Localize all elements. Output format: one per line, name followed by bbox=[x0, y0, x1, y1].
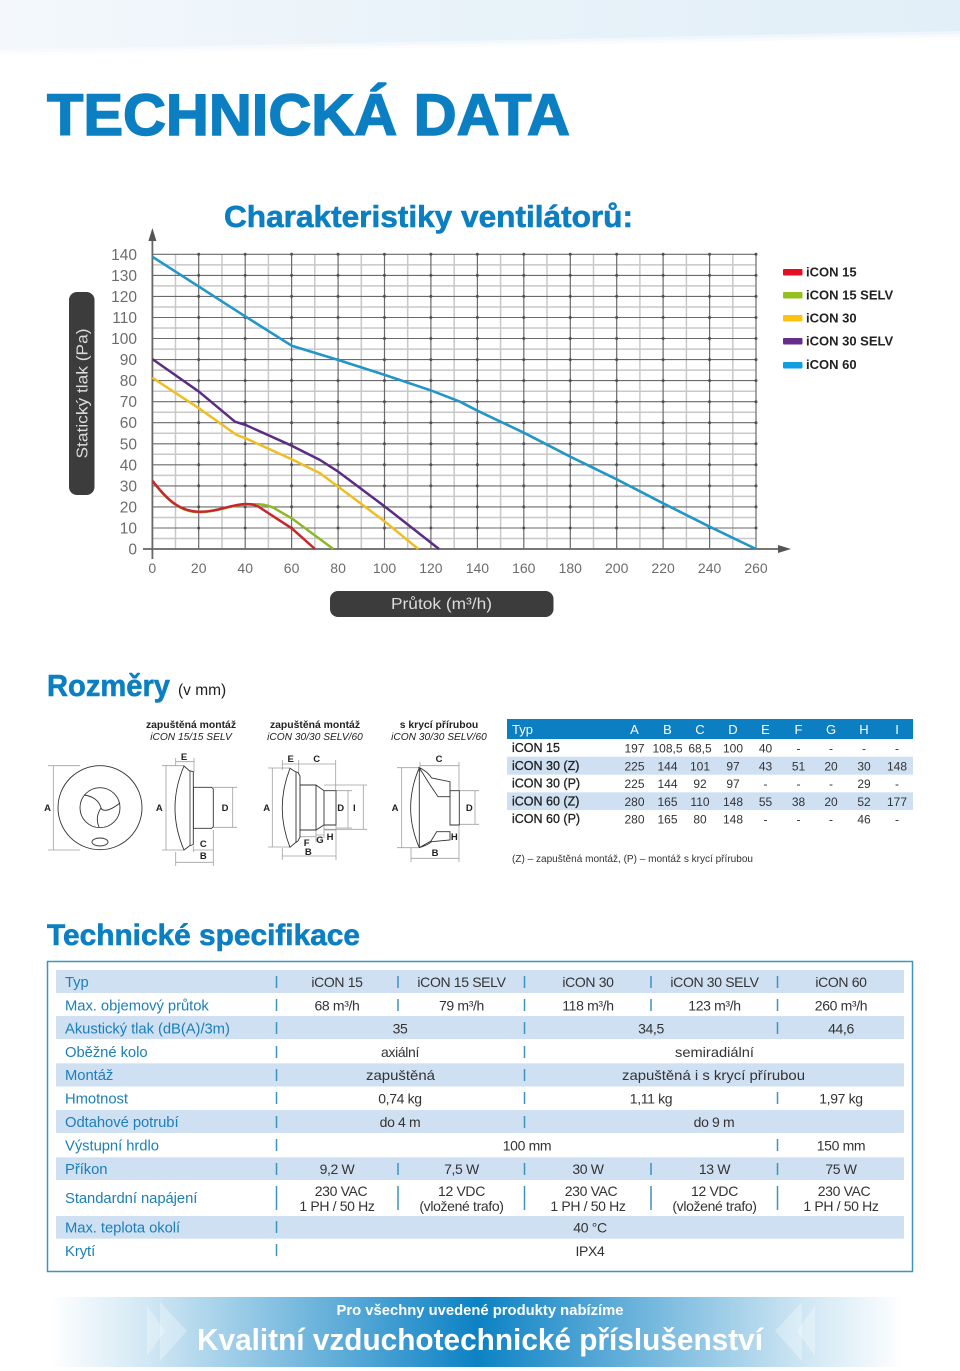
legend: iCON 15 bbox=[806, 264, 857, 280]
row: iCON 30 (P): 92 bbox=[693, 777, 707, 791]
row: ambient temperature: 40 °C bbox=[573, 1220, 607, 1236]
row: flow bbox=[65, 998, 867, 1014]
y axis title pill: Statický tlak (Pa) bbox=[74, 328, 92, 458]
row: iCON 30 (Z): 148 bbox=[887, 759, 907, 773]
row: ambient temperature: Max. teplota okolí bbox=[65, 1220, 181, 1236]
y axis labels: 120 bbox=[111, 289, 137, 306]
x axis labels: 180 bbox=[559, 560, 582, 576]
diagram: flush mount iCON 30/60: E bbox=[288, 754, 294, 765]
row: Typ: iCON 15 bbox=[311, 974, 363, 990]
row: iCON 60 (P): 165 bbox=[657, 812, 678, 826]
row: noise: Akustický tlak (dB(A)/3m) bbox=[65, 1022, 230, 1038]
x axis labels: 140 bbox=[466, 560, 489, 576]
row: power: Příkon bbox=[65, 1162, 107, 1178]
row: iCON 15: - bbox=[829, 742, 833, 756]
right chevrons bbox=[775, 1302, 815, 1361]
row: mounting: zapuštěná i s krycí přírubou bbox=[622, 1067, 805, 1083]
row: iCON 15: iCON 15 bbox=[512, 741, 560, 755]
row: iCON 30 (P): - bbox=[829, 777, 833, 791]
row: iCON 60 (Z): 20 bbox=[824, 795, 838, 809]
diagram: flush mount iCON 30/60: B bbox=[305, 847, 312, 858]
diagram: flush mount iCON 15: D bbox=[222, 803, 229, 814]
diagram: flush mount iCON 30/60: iCON 30/30 SELV/60 bbox=[267, 732, 363, 743]
row: mounting: Montáž bbox=[65, 1068, 113, 1084]
legend: iCON 60 bbox=[806, 357, 857, 372]
row: supply: (vložené trafo) bbox=[672, 1198, 757, 1214]
row: iCON 15: 40 bbox=[759, 742, 772, 756]
row: iCON 30 (Z): 51 bbox=[792, 759, 805, 773]
curve: iCON 30 SELV bbox=[152, 359, 439, 549]
table header: H bbox=[859, 722, 869, 737]
row: power bbox=[65, 1161, 858, 1178]
x axis labels: 120 bbox=[419, 560, 443, 576]
diagram: cover flange mount: B bbox=[432, 848, 439, 859]
row: supply bbox=[65, 1183, 879, 1214]
row: Typ bbox=[65, 974, 867, 991]
row: supply: Standardní napájení bbox=[65, 1191, 198, 1207]
row: weight: 0,74 kg bbox=[378, 1090, 422, 1106]
diagram: flush mount iCON 15: zapuštěná montáž bbox=[146, 720, 236, 731]
table header: A bbox=[630, 722, 639, 737]
diagram: flush mount iCON 30/60 bbox=[263, 720, 367, 860]
row: iCON 30 (Z): 144 bbox=[657, 759, 678, 773]
banner subtitle: Pro všechny uvedené produkty nabízíme bbox=[336, 1303, 624, 1319]
row: outlet bbox=[65, 1138, 865, 1154]
row: protection: IPX4 bbox=[576, 1243, 605, 1259]
x axis labels: 0 bbox=[148, 560, 156, 576]
row: Typ: iCON 30 SELV bbox=[670, 974, 760, 990]
row: iCON 60 (Z): 110 bbox=[690, 795, 710, 809]
table header: D bbox=[728, 722, 738, 737]
row: iCON 60 (Z) bbox=[507, 792, 913, 810]
diagram: cover flange mount: s krycí přírubou bbox=[400, 720, 478, 731]
x axis labels: 260 bbox=[744, 560, 768, 576]
table header bbox=[507, 719, 913, 739]
row: iCON 60 (P): 148 bbox=[723, 812, 743, 826]
row: iCON 15 bbox=[512, 741, 899, 756]
row: power: 75 W bbox=[825, 1161, 858, 1177]
row: weight: 1,97 kg bbox=[819, 1090, 863, 1106]
row: iCON 60 (P): - bbox=[764, 812, 768, 826]
row: iCON 30 (P): - bbox=[764, 777, 768, 791]
table header: G bbox=[826, 722, 836, 737]
x axis labels: 100 bbox=[373, 560, 396, 576]
y axis labels bbox=[111, 247, 137, 558]
row: iCON 60 (P): 280 bbox=[624, 812, 645, 826]
row: power: 7,5 W bbox=[444, 1161, 480, 1177]
row: power: 30 W bbox=[572, 1161, 605, 1177]
row: iCON 30 (Z): 225 bbox=[624, 759, 645, 773]
y axis title pill bbox=[69, 292, 94, 495]
x axis labels: 200 bbox=[605, 560, 629, 576]
x axis title pill bbox=[330, 591, 554, 617]
row: supply: 230 VAC bbox=[315, 1183, 368, 1199]
row: iCON 15: 197 bbox=[624, 742, 645, 756]
legend: iCON 30 bbox=[806, 310, 857, 326]
y axis labels: 10 bbox=[120, 520, 137, 538]
row: impeller bbox=[65, 1044, 754, 1061]
diagram: flush mount iCON 30/60: G bbox=[316, 835, 324, 846]
diagram: flush mount iCON 15: E bbox=[181, 752, 187, 763]
diagram: flush mount iCON 15: iCON 15/15 SELV bbox=[150, 732, 233, 743]
row: mounting bbox=[65, 1067, 805, 1084]
banner title: Kvalitní vzduchotechnické příslušenství bbox=[197, 1322, 764, 1357]
row: flow: 260 m³/h bbox=[815, 998, 867, 1014]
row: iCON 30 (P): - bbox=[895, 777, 899, 791]
row: iCON 30 (P): 144 bbox=[657, 777, 678, 791]
top decorative band bbox=[0, 0, 960, 56]
row: Typ: Typ bbox=[65, 975, 89, 991]
row: outlet: Výstupní hrdlo bbox=[65, 1138, 159, 1154]
row: iCON 60 (P) bbox=[512, 812, 899, 826]
row: iCON 60 (Z): 52 bbox=[857, 795, 871, 809]
table header: I bbox=[895, 722, 899, 737]
row: iCON 15: - bbox=[796, 742, 800, 756]
y axis labels: 50 bbox=[120, 436, 137, 453]
table header: C bbox=[695, 722, 705, 737]
heading: technical specifications: Technické specifikace bbox=[47, 919, 360, 952]
row: iCON 30 (P): 225 bbox=[624, 777, 645, 791]
row: impeller: axiální bbox=[381, 1044, 419, 1060]
row: iCON 60 (Z): 165 bbox=[657, 795, 678, 809]
y axis labels: 110 bbox=[112, 310, 137, 327]
diagram: cover flange mount: H bbox=[451, 832, 458, 843]
x axis labels bbox=[148, 560, 768, 576]
x axis labels: 220 bbox=[651, 560, 675, 576]
row: iCON 30 (P): 97 bbox=[726, 777, 740, 791]
row: protection bbox=[65, 1243, 605, 1260]
heading: dimensions: (v mm) bbox=[178, 682, 226, 699]
diagram: cover flange mount bbox=[391, 720, 487, 862]
axes with arrows bbox=[143, 228, 791, 559]
row: supply: 1 PH / 50 Hz bbox=[299, 1198, 375, 1214]
legend: iCON 15 SELV bbox=[806, 288, 894, 302]
row: Typ: iCON 60 bbox=[815, 974, 867, 990]
row: power: 9,2 W bbox=[320, 1161, 356, 1177]
row: iCON 30 (P) bbox=[512, 776, 899, 791]
row: flow: Max. objemový průtok bbox=[65, 998, 209, 1014]
row: iCON 60 (P): - bbox=[796, 812, 800, 826]
row: Typ: iCON 30 bbox=[562, 974, 614, 990]
x axis labels: 240 bbox=[698, 560, 721, 576]
row: duct bbox=[65, 1114, 734, 1131]
left chevrons bbox=[147, 1302, 187, 1361]
panel: specifications table bbox=[48, 962, 912, 1272]
y axis labels: 70 bbox=[120, 394, 137, 411]
row: impeller: semiradiální bbox=[675, 1044, 754, 1060]
row: supply: 230 VAC bbox=[565, 1183, 618, 1199]
curve: iCON 15 SELV bbox=[152, 481, 333, 549]
row: iCON 60 (Z): iCON 60 (Z) bbox=[512, 794, 579, 808]
row: iCON 30 (Z): iCON 30 (Z) bbox=[512, 759, 579, 773]
x axis labels: 20 bbox=[191, 560, 207, 576]
row: iCON 15: 68,5 bbox=[688, 742, 712, 756]
row: supply: 12 VDC bbox=[691, 1183, 738, 1199]
diagram: front view: A bbox=[44, 803, 51, 814]
row: impeller: Oběžné kolo bbox=[65, 1045, 148, 1061]
y axis labels: 140 bbox=[111, 247, 137, 264]
row: iCON 30 (Z): 43 bbox=[759, 759, 772, 773]
row: iCON 15: - bbox=[862, 742, 866, 756]
y axis labels: 80 bbox=[120, 373, 137, 390]
table footnote: (Z) – zapuštěná montáž, (P) – montáž s krycí přírubou bbox=[512, 853, 753, 865]
y axis labels: 0 bbox=[128, 542, 137, 558]
y axis labels: 60 bbox=[120, 415, 137, 432]
y axis labels: 40 bbox=[120, 457, 137, 474]
table header: F bbox=[795, 722, 803, 737]
row: supply: 12 VDC bbox=[438, 1183, 485, 1199]
row: iCON 60 (Z): 55 bbox=[759, 795, 772, 809]
curve: iCON 15 bbox=[152, 481, 315, 549]
table header: B bbox=[663, 722, 672, 737]
row: flow: 79 m³/h bbox=[439, 998, 484, 1014]
diagram: flush mount iCON 30/60: I bbox=[353, 803, 356, 814]
row: iCON 30 (Z): 97 bbox=[726, 759, 740, 773]
diagram: flush mount iCON 30/60: D bbox=[337, 803, 344, 814]
row: ambient temperature bbox=[65, 1220, 607, 1236]
row: iCON 30 (P): - bbox=[796, 777, 800, 791]
chart grid bbox=[152, 254, 757, 549]
row: iCON 60 (P): 46 bbox=[857, 812, 871, 826]
heading: dimensions: Rozměry bbox=[47, 668, 171, 703]
diagram: flush mount iCON 30/60: zapuštěná montáž bbox=[270, 720, 360, 731]
footer banner bbox=[50, 1297, 905, 1367]
title: TECHNICKÁ DATA bbox=[47, 83, 570, 148]
diagram: flush mount iCON 30/60: H bbox=[327, 832, 334, 843]
y axis labels: 30 bbox=[120, 478, 137, 495]
row: supply: 1 PH / 50 Hz bbox=[803, 1198, 879, 1214]
row: iCON 30 (Z) bbox=[507, 757, 913, 775]
row: power: 13 W bbox=[699, 1161, 731, 1177]
row: flow: 123 m³/h bbox=[688, 998, 741, 1014]
y axis labels: 130 bbox=[111, 268, 137, 285]
row: iCON 60 (P): - bbox=[895, 812, 899, 826]
row: iCON 60 (Z): 177 bbox=[887, 795, 907, 809]
curve: iCON 60 bbox=[152, 257, 756, 549]
y axis labels: 90 bbox=[120, 352, 137, 369]
diagram: flush mount iCON 30/60: F bbox=[304, 838, 310, 849]
row: iCON 15: - bbox=[895, 742, 899, 756]
y axis labels: 20 bbox=[120, 499, 137, 516]
x axis title pill: Průtok (m³/h) bbox=[391, 595, 492, 613]
diagram: flush mount iCON 30/60: A bbox=[263, 803, 270, 814]
y axis labels: 100 bbox=[111, 331, 137, 348]
row: supply: 230 VAC bbox=[818, 1183, 871, 1199]
x axis labels: 160 bbox=[512, 560, 536, 576]
row: weight: Hmotnost bbox=[65, 1092, 128, 1108]
diagram: flush mount iCON 15: B bbox=[200, 851, 207, 862]
curve: iCON 30 bbox=[152, 378, 418, 549]
x axis labels: 80 bbox=[330, 560, 346, 576]
row: supply: 1 PH / 50 Hz bbox=[550, 1198, 626, 1214]
row: noise: 44,6 bbox=[828, 1020, 854, 1036]
column separators bbox=[276, 976, 778, 1256]
row: flow: 118 m³/h bbox=[562, 998, 614, 1014]
diagram: flush mount iCON 15: C bbox=[200, 839, 207, 850]
diagram: cover flange mount: iCON 30/30 SELV/60 bbox=[391, 732, 487, 743]
row: duct: do 9 m bbox=[694, 1114, 734, 1130]
diagram: front view bbox=[44, 766, 142, 850]
chart heading: Charakteristiky ventilátorů: bbox=[224, 199, 633, 234]
table header: Typ bbox=[512, 722, 533, 737]
row: iCON 30 (Z): 30 bbox=[857, 759, 871, 773]
row: iCON 15: 100 bbox=[723, 742, 743, 756]
diagram: flush mount iCON 15: A bbox=[156, 803, 163, 814]
row: outlet: 150 mm bbox=[817, 1138, 865, 1154]
row: iCON 60 (Z): 280 bbox=[624, 795, 645, 809]
row: noise: 35 bbox=[393, 1020, 408, 1036]
row: iCON 15: 108,5 bbox=[652, 742, 683, 756]
x axis labels: 40 bbox=[237, 560, 253, 576]
row: weight bbox=[65, 1090, 863, 1108]
diagram: flush mount iCON 15 bbox=[146, 720, 237, 866]
row: Typ: iCON 15 SELV bbox=[417, 974, 507, 990]
row: noise bbox=[65, 1020, 854, 1038]
dimensions table bbox=[507, 719, 913, 826]
row: iCON 60 (Z): 148 bbox=[723, 795, 743, 809]
row: iCON 30 (P): 29 bbox=[857, 777, 871, 791]
row: iCON 30 (Z): 20 bbox=[824, 759, 838, 773]
diagram: flush mount iCON 30/60: C bbox=[313, 754, 320, 765]
diagram: cover flange mount: D bbox=[466, 803, 473, 814]
row: iCON 60 (P): - bbox=[829, 812, 833, 826]
legend bbox=[783, 264, 894, 372]
row: supply: (vložené trafo) bbox=[419, 1198, 504, 1214]
row: duct: do 4 m bbox=[380, 1114, 420, 1130]
row: outlet: 100 mm bbox=[503, 1138, 551, 1154]
row: duct: Odtahové potrubí bbox=[65, 1115, 179, 1131]
line chart: fan characteristics bbox=[111, 228, 791, 576]
row: flow: 68 m³/h bbox=[314, 998, 360, 1014]
row: iCON 60 (P): iCON 60 (P) bbox=[512, 812, 580, 826]
row: noise: 34,5 bbox=[638, 1020, 664, 1036]
legend: iCON 30 SELV bbox=[806, 334, 894, 348]
row: protection: Krytí bbox=[65, 1244, 96, 1260]
row: weight: 1,11 kg bbox=[630, 1090, 672, 1106]
diagram: cover flange mount: C bbox=[436, 754, 443, 765]
x axis labels: 60 bbox=[284, 560, 300, 576]
row: iCON 60 (P): 80 bbox=[693, 812, 707, 826]
row stripes bbox=[56, 970, 904, 1239]
diagram: cover flange mount: A bbox=[392, 803, 399, 814]
row: iCON 30 (Z): 101 bbox=[690, 759, 710, 773]
row: iCON 60 (Z): 38 bbox=[792, 795, 805, 809]
table header: E bbox=[761, 722, 770, 737]
row: mounting: zapuštěná bbox=[366, 1067, 435, 1083]
row: iCON 30 (P): iCON 30 (P) bbox=[512, 776, 580, 790]
